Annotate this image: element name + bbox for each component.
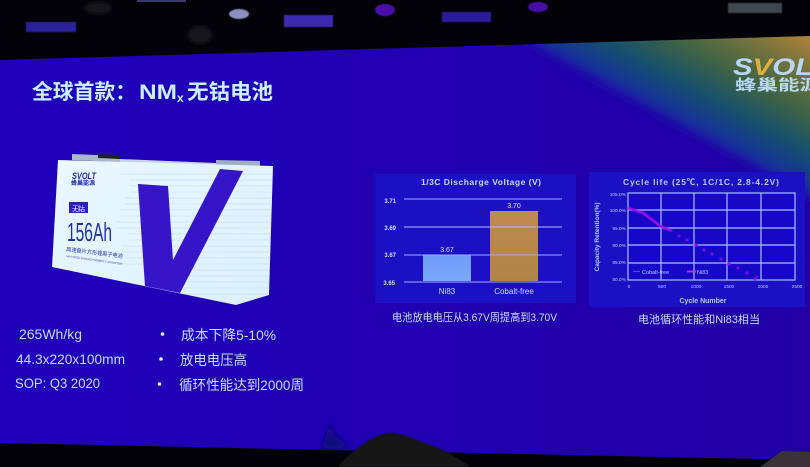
axis labels: 95.0% [612,226,627,232]
panel: discharge voltage bar chart: 3.71 [384,199,397,205]
battery label: 无钴 [72,204,85,213]
SVOLT logo: 蜂巢能源 [735,76,810,94]
benefits list: 放电电压高 [180,352,247,368]
panel: discharge voltage bar chart: 1/3C Discharge Voltage (V) [421,177,541,187]
battery label: SVOLT [72,171,97,181]
caption: cycle life: 电池循环性能和Ni83相当 [638,312,760,326]
panel: cycle life line chart [589,172,805,307]
axis labels: 0 [628,284,631,290]
axis labels: 105.0% [610,192,627,198]
panel: discharge voltage bar chart: Ni83 [439,287,456,296]
plot grid [628,193,795,280]
caption: voltage: 电池放电电压从3.67V周提高到3.70V [392,310,558,324]
axis labels [610,192,803,290]
battery V mark [138,169,243,293]
battery terminals [72,154,260,166]
battery label: 蜂巢能源 [71,179,95,187]
axis labels: 85.0% [612,260,627,266]
capacity curve [628,208,758,280]
battery illustration [52,154,275,305]
title: NM [139,81,177,104]
benefits list: 循环性能达到2000周 [179,377,304,393]
title: x [177,91,184,105]
axis labels: 90.0% [612,243,627,249]
SVOLT logo [733,54,810,94]
benefits list: 成本下降5-10% [181,327,276,343]
bars [423,211,538,281]
specification list: SOP: Q3 2020 [15,375,100,391]
specification list: 44.3x220x100mm [16,351,125,367]
specification list [15,326,125,391]
axis labels: 100.0% [610,208,627,214]
audience heads foreground [322,422,810,467]
title [32,80,273,105]
battery label: 156Ah [67,217,112,247]
legend: Ni83 [697,270,708,276]
axis labels: 2500 [792,284,803,290]
legend: Cobalt-free [642,270,669,276]
axis labels: 2000 [758,284,769,290]
panel: discharge voltage bar chart [375,174,576,303]
legend [633,270,708,276]
battery stripes [115,174,275,294]
specification list: 265Wh/kg [19,326,82,342]
battery label: 高速叠片方形锂离子电池 [66,245,124,260]
panel: cycle life line chart: Cycle life (25℃, 1C/1C, 2.8-4.2V) [623,177,779,187]
panel: discharge voltage bar chart: 3.65 [383,281,396,287]
panel: discharge voltage bar chart: 3.69 [384,226,397,232]
panel: cycle life line chart: Capacity Retention(%) [594,203,601,271]
axis labels: 1000 [691,284,702,290]
panel: discharge voltage bar chart: 3.67 [440,247,454,254]
axis labels: 1500 [724,284,735,290]
panel: discharge voltage bar chart: Cobalt-free [494,287,534,296]
battery label [66,171,124,266]
panel: discharge voltage bar chart: 3.67 [384,253,397,259]
title: 无钴电池 [187,81,273,104]
benefits list [158,327,304,393]
battery label: HIGH SPEED STACKING PRISMATIC Li-ION BATTERY [66,254,123,266]
battery body [52,160,273,305]
axis labels: 80.0% [612,277,627,283]
title: 全球首款： [32,80,136,104]
panel: cycle life line chart: Cycle Number [679,298,727,305]
axis labels: 500 [658,284,666,290]
panel: discharge voltage bar chart: 3.70 [507,203,521,210]
